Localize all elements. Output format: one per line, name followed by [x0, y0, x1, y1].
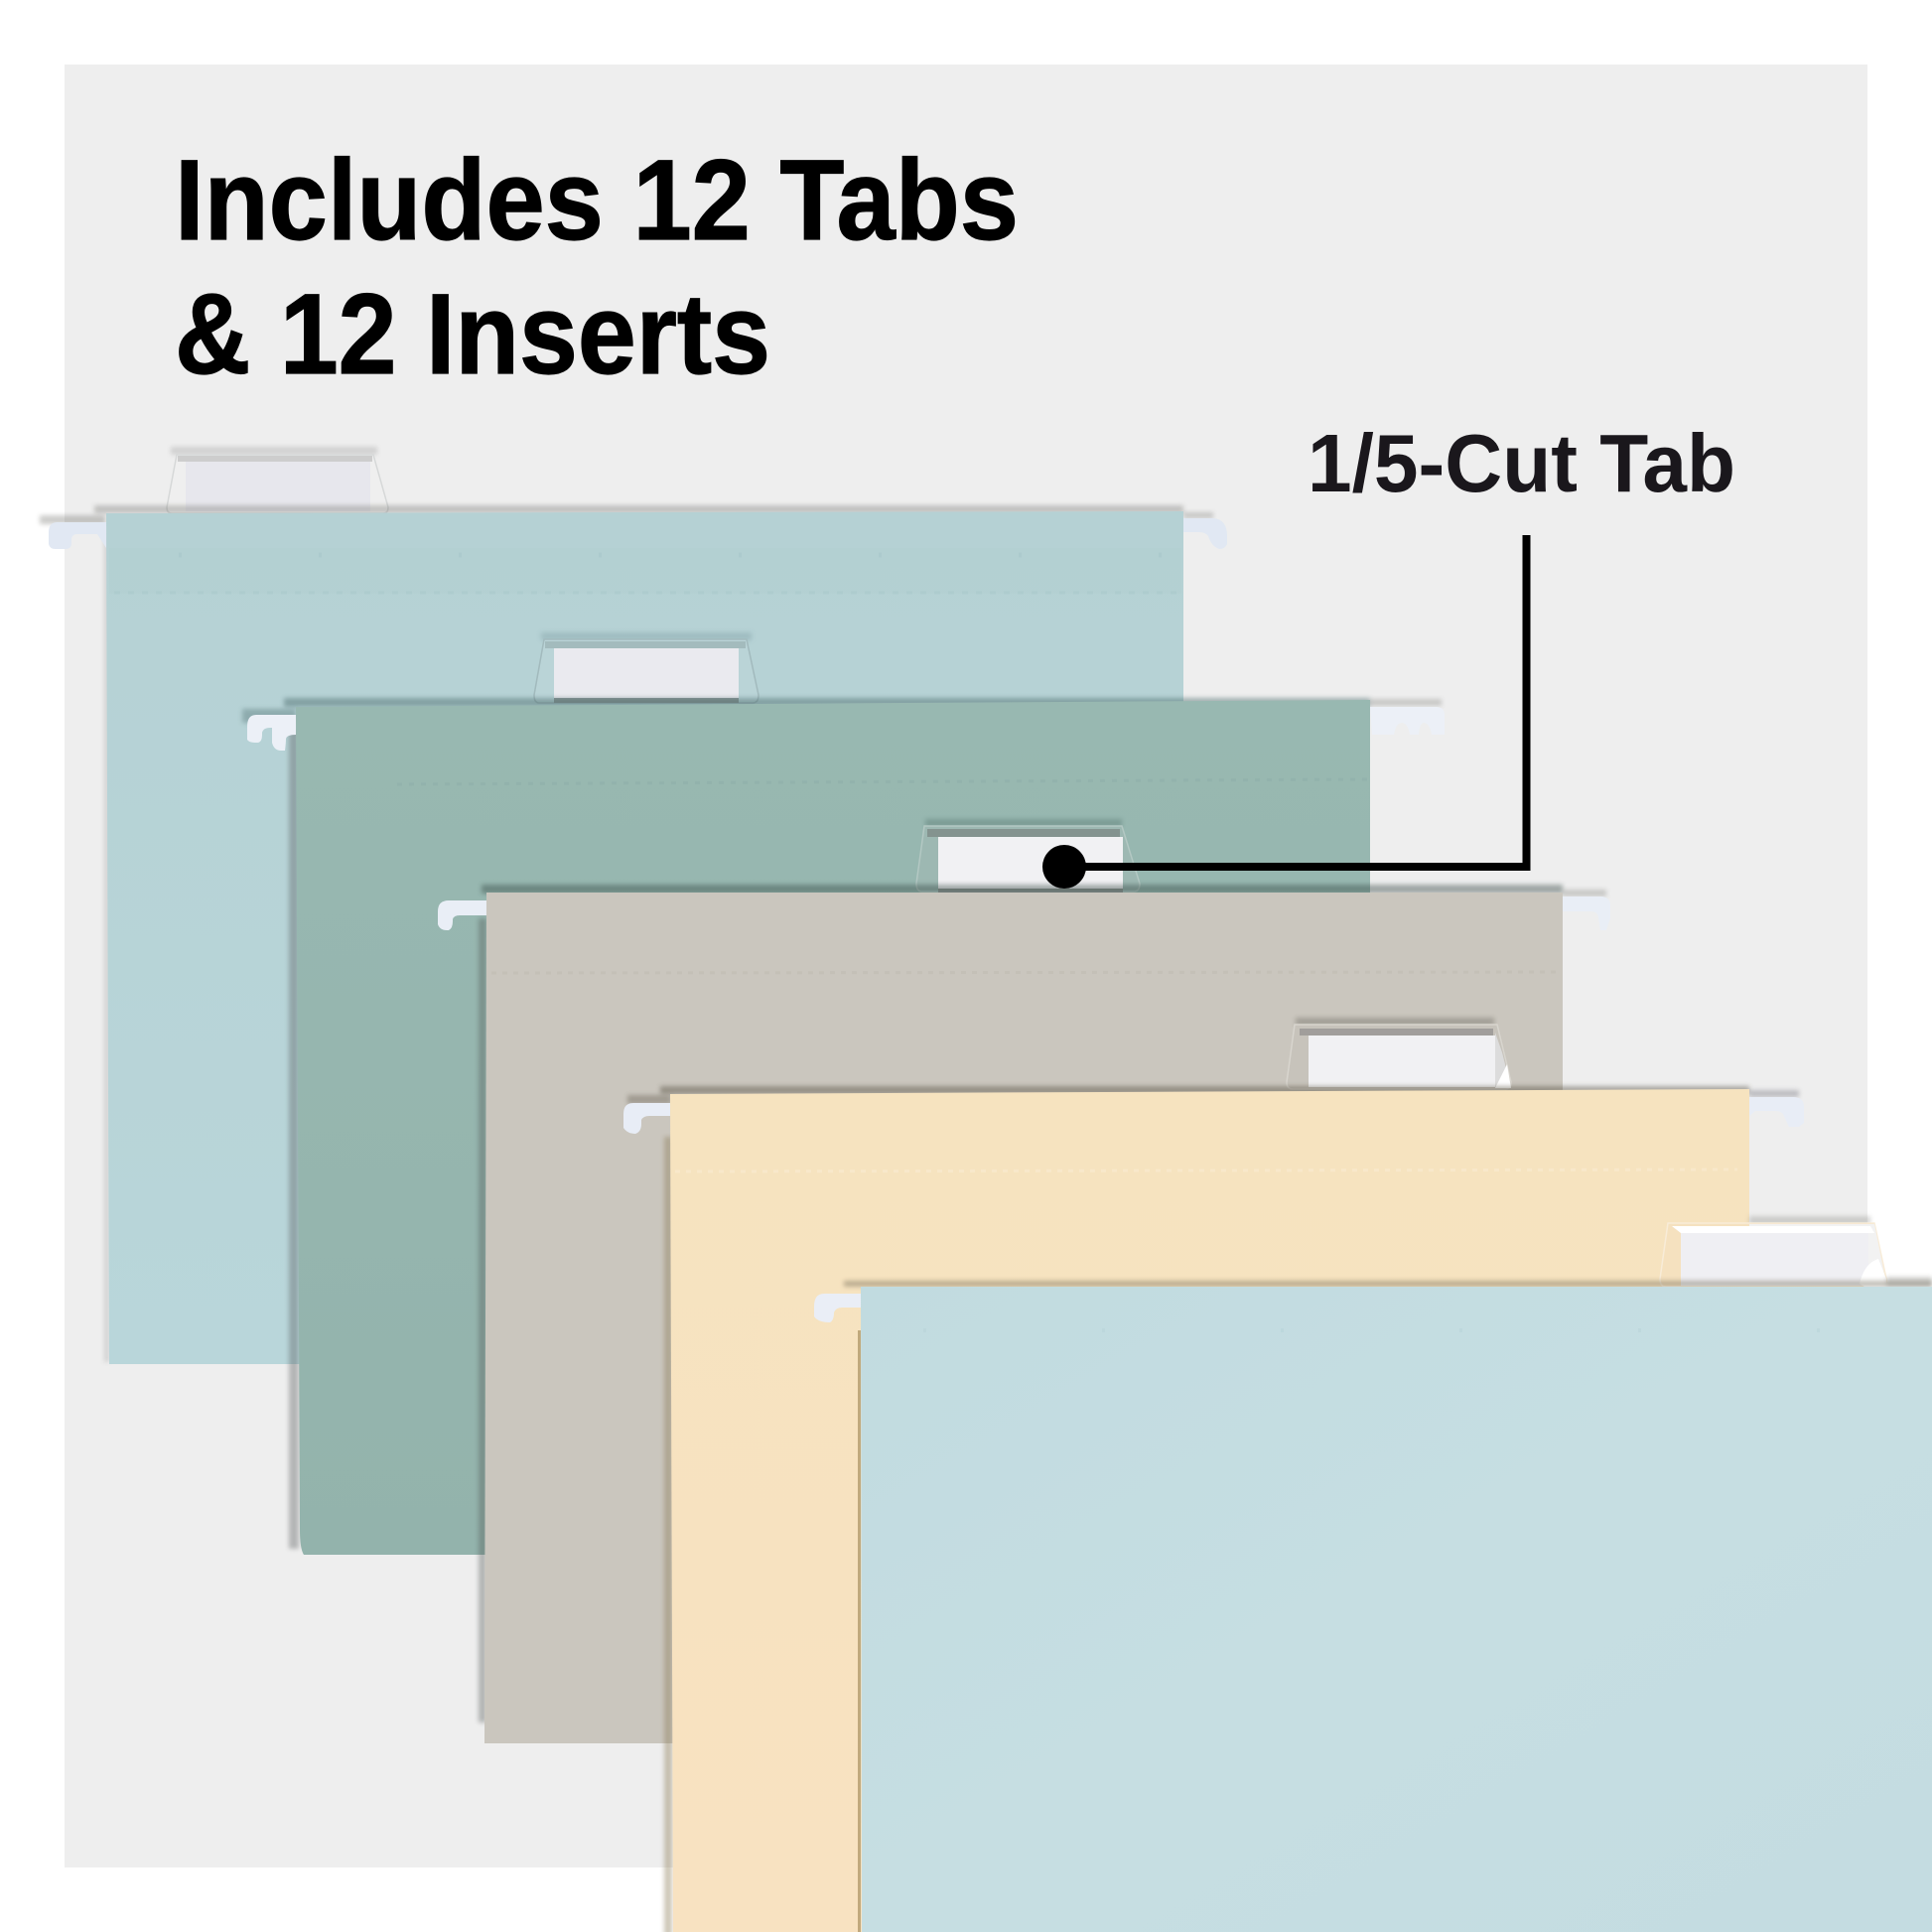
tab 3 [916, 819, 1140, 893]
hanger hooks [623, 1097, 1804, 1134]
hanger hook [814, 1294, 861, 1322]
callout dot [1042, 845, 1086, 889]
tab 5 [1660, 1216, 1886, 1287]
hanger hooks [247, 707, 1445, 751]
folder 1: light aqua [40, 447, 1227, 1364]
title [175, 137, 1019, 398]
title line 2: & 12 Inserts [175, 271, 770, 398]
folder 2: sage green [242, 632, 1445, 1555]
tab 1 [167, 447, 388, 513]
callout: 1/5-cut tab [1042, 417, 1735, 889]
callout leader line [1064, 535, 1527, 867]
tab 4 [1287, 1018, 1511, 1089]
callout label: 1/5-Cut Tab [1308, 417, 1735, 509]
tab 2 [534, 632, 759, 703]
folder 5: pale blue [814, 1216, 1932, 1932]
folder 3: warm gray [438, 819, 1610, 1743]
hanger hooks [438, 897, 1610, 930]
folder 4: cream yellow [623, 1018, 1804, 1932]
hanger hooks [49, 518, 1227, 549]
title line 1: Includes 12 Tabs [175, 137, 1019, 264]
